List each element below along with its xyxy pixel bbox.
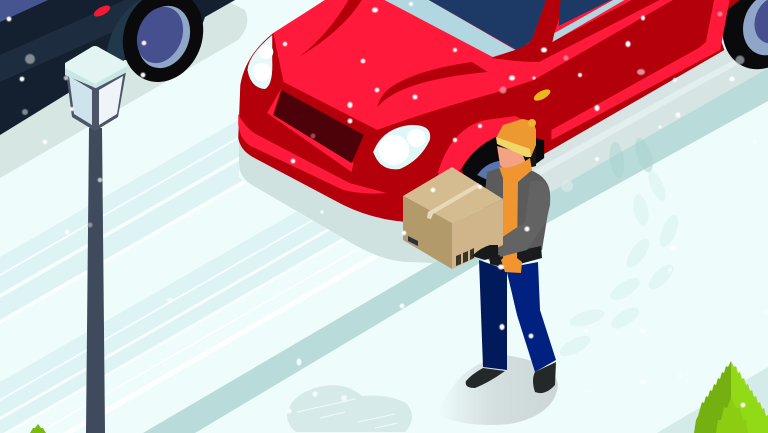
dark car body (0, 0, 235, 135)
small tree (30, 424, 46, 433)
dark car tail light (94, 6, 110, 16)
door handle (534, 89, 550, 101)
hair (527, 148, 536, 168)
road tyre tracks (0, 120, 380, 433)
snow cap (65, 46, 127, 88)
left headlight (248, 35, 272, 89)
glove (472, 245, 498, 260)
blurred grey snowflakes (22, 12, 744, 228)
left leg (479, 260, 507, 370)
neck scarf (499, 158, 532, 182)
hood creases (299, 0, 362, 57)
dark car wheel (122, 0, 204, 82)
background verge strip (657, 367, 768, 433)
windscreen (384, 0, 515, 57)
front wheel (462, 136, 544, 188)
hat band (496, 137, 531, 157)
footprints (557, 136, 682, 360)
side window (552, 0, 624, 42)
grille surround (267, 88, 354, 172)
jacket (480, 165, 550, 262)
fragile symbols (456, 248, 474, 266)
person shadow (453, 355, 558, 425)
dark car (0, 0, 235, 135)
courier (403, 119, 556, 393)
hood and door top (273, 0, 673, 130)
post (86, 128, 105, 433)
wheel arch (438, 116, 522, 175)
large tree (694, 361, 768, 433)
dark car fender (106, 0, 142, 62)
right headlight (373, 125, 430, 169)
scarf hanging end (501, 178, 522, 273)
raised arm (498, 181, 550, 257)
window frame and pillar (492, 0, 660, 62)
curb shadow band (143, 68, 768, 433)
right shoe (533, 362, 556, 393)
grille (273, 90, 364, 163)
parcel box (403, 167, 503, 269)
car body lower shell (238, 0, 740, 222)
puddle of ice (287, 385, 412, 432)
lantern (66, 72, 126, 131)
shadow of dark car (0, 0, 247, 178)
hat (496, 119, 536, 157)
right leg (506, 262, 556, 372)
door sill highlight (551, 0, 730, 140)
rear wheel (722, 0, 768, 70)
belt hem (490, 246, 542, 268)
left shoe (466, 368, 505, 388)
face (497, 146, 526, 170)
bumper highlight (238, 114, 387, 194)
lamp post (65, 46, 127, 433)
pavement strip beside red car (532, 50, 768, 192)
shadow of red car (239, 142, 437, 263)
red car (238, 0, 768, 222)
